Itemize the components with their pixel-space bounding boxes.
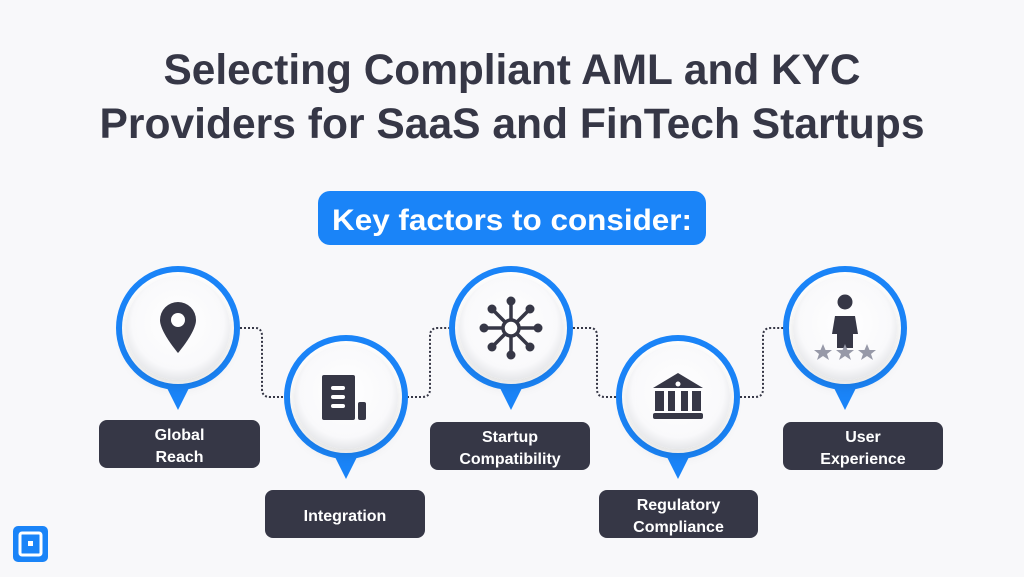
label: Regulatory Compliance <box>599 490 758 538</box>
label: User Experience: Experience <box>820 451 906 468</box>
icon: document <box>322 375 366 420</box>
label: Integration: Integration <box>304 508 386 525</box>
item 2: Integration <box>265 338 425 538</box>
icon: location pin <box>160 302 196 353</box>
label: Integration <box>265 490 425 538</box>
title: Providers for SaaS and FinTech Startups <box>100 100 924 148</box>
icon: user with stars <box>814 294 876 360</box>
label: Global Reach: Reach <box>155 449 204 466</box>
label: User Experience <box>783 422 943 470</box>
logo icon <box>13 526 48 562</box>
icon: bank building <box>653 373 703 419</box>
item 1: Global Reach <box>99 269 260 468</box>
label: Startup Compatibility: Compatibility <box>459 451 561 468</box>
label: Global Reach: Global <box>155 427 204 444</box>
icon: network hub <box>480 296 542 360</box>
label: Regulatory Compliance: Compliance <box>633 519 724 536</box>
title: Selecting Compliant AML and KYC <box>164 46 860 94</box>
item 3: Startup Compatibility <box>430 269 590 470</box>
title <box>100 46 924 148</box>
label: Startup Compatibility: Startup <box>482 429 538 446</box>
subtitle pill: key factors <box>318 191 706 245</box>
item 5: User Experience <box>783 269 943 470</box>
label: User Experience: User <box>845 429 881 446</box>
label: Global Reach <box>99 420 260 468</box>
item 4: Regulatory Compliance <box>599 338 758 538</box>
label: Regulatory Compliance: Regulatory <box>637 497 720 514</box>
label: Startup Compatibility <box>430 422 590 470</box>
subtitle pill: key factors: Key factors to consider: <box>332 204 692 237</box>
dotted connectors <box>240 328 784 397</box>
